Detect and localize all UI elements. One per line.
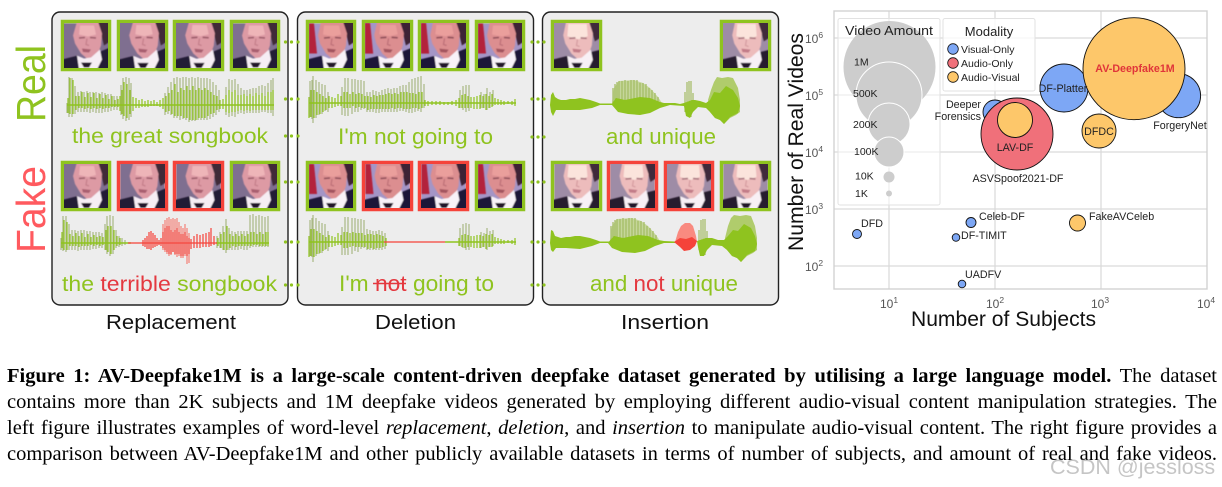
row label: Real: Real xyxy=(8,45,54,122)
legend: video amount: 1K xyxy=(855,188,868,200)
real waveform xyxy=(550,77,740,124)
y axis tick labels: 6 xyxy=(818,30,823,40)
figure caption: left figure illustrates examples of word-level replacement, deletion, and insertion to manipulate audio-visual content. The right figure provides a xyxy=(7,417,1217,439)
fake video frames xyxy=(307,162,524,210)
bubble labels xyxy=(861,63,1207,281)
y axis tick labels: 10 xyxy=(805,203,818,217)
fake waveform with replaced segment xyxy=(61,214,269,264)
real waveform xyxy=(309,76,516,123)
x axis tick labels: 10 xyxy=(1091,297,1104,311)
real transcript: and unique xyxy=(606,124,716,149)
figure caption: contains more than 2K subjects and 1M deepfake videos generated by employing different audio-visual content manipulation strategies. The xyxy=(7,391,1217,413)
x axis tick labels xyxy=(880,295,1215,311)
y axis tick labels: 4 xyxy=(818,144,823,154)
plot frame and grid xyxy=(834,11,1207,289)
real video frames xyxy=(307,21,524,70)
caption label: Insertion: Insertion xyxy=(621,312,709,334)
legend: video amount: 100K xyxy=(854,146,879,158)
bubble labels: ForgeryNet xyxy=(1153,120,1207,132)
y axis tick labels: 2 xyxy=(818,258,823,268)
bubble labels: Celeb-DF xyxy=(979,211,1025,223)
y axis tick labels: 10 xyxy=(805,260,818,274)
watermark: CSDN @jessloss xyxy=(1050,455,1215,479)
y axis title: Number of Real Videos xyxy=(785,33,808,251)
fake waveform with deleted segment xyxy=(309,215,516,262)
real transcript: the great songbook xyxy=(72,125,269,148)
legend: video amount: 10K xyxy=(855,170,874,182)
panel: Deletion xyxy=(298,12,534,305)
y axis tick labels: 10 xyxy=(805,89,818,103)
x axis tick labels: 4 xyxy=(1210,295,1215,305)
fake transcript with struck-through word: I'm not going to xyxy=(339,271,494,296)
legend: video amount: Video Amount xyxy=(845,23,933,38)
caption label: Replacement: Replacement xyxy=(106,312,236,334)
x axis tick labels: 1 xyxy=(893,295,898,305)
figure caption: comparison between AV-Deepfake1M and other publicly available datasets in terms of number of subjects, and amount of real and fake videos. xyxy=(7,443,1217,465)
bubble labels: FakeAVCeleb xyxy=(1089,211,1154,223)
real transcript: I'm not going to xyxy=(338,124,493,149)
x axis tick labels: 3 xyxy=(1104,295,1109,305)
connector dots xyxy=(284,40,546,287)
legend: video amount: 500K xyxy=(853,88,878,100)
legend: modality: Audio-Only xyxy=(961,58,1014,70)
x axis title: Number of Subjects xyxy=(911,308,1096,331)
real video frames xyxy=(552,21,770,70)
fake transcript: and not unique xyxy=(590,271,738,296)
fake video frames xyxy=(62,162,279,210)
panel: Replacement xyxy=(52,12,288,305)
bubble labels: Forensics xyxy=(935,111,981,123)
legend: modality: Visual-Only xyxy=(961,44,1015,56)
x axis tick labels: 2 xyxy=(999,295,1004,305)
bubble labels: LAV-DF xyxy=(997,142,1034,154)
bubble chart xyxy=(785,11,1215,331)
real waveform xyxy=(67,77,274,122)
y axis tick labels xyxy=(805,30,823,274)
x axis tick labels: 10 xyxy=(880,297,893,311)
legend: modality: Audio-Visual xyxy=(961,72,1020,84)
y axis tick labels: 5 xyxy=(818,87,823,97)
caption label: Deletion: Deletion xyxy=(375,312,456,334)
legend: video amount: 1M xyxy=(854,56,869,68)
real video frames xyxy=(62,21,279,70)
bubble labels: DFDC xyxy=(1084,126,1114,138)
bubble labels: UADFV xyxy=(965,269,1002,281)
x axis tick labels: 10 xyxy=(1197,297,1210,311)
y axis tick labels: 10 xyxy=(805,146,818,160)
bubble labels: DFD xyxy=(861,218,883,230)
fake waveform with inserted segment xyxy=(550,215,757,262)
fake video frames xyxy=(552,162,770,210)
bubble labels: DF-TIMIT xyxy=(961,230,1007,242)
legend: modality: Modality xyxy=(965,24,1014,39)
y axis tick labels: 3 xyxy=(818,201,823,211)
x axis tick labels: 10 xyxy=(986,297,999,311)
fake transcript: the terrible songbook xyxy=(62,273,278,296)
bubbles: datasets xyxy=(852,18,1201,288)
figure caption: Figure 1: AV-Deepfake1M is a large-scale content-driven deepfake dataset generated by utilising a large language model. The dataset xyxy=(7,365,1217,387)
bubble labels: AV-Deepfake1M xyxy=(1095,63,1175,75)
legend: video amount: 200K xyxy=(853,119,878,131)
bubble labels: DF-Platter xyxy=(1039,83,1088,95)
panel: Insertion xyxy=(542,12,778,305)
row label: Fake: Fake xyxy=(8,166,54,253)
bubble labels: Deeper xyxy=(946,99,981,111)
legend: video amount xyxy=(838,18,940,205)
legend: modality xyxy=(943,18,1035,91)
bubble labels: ASVSpoof2021-DF xyxy=(973,173,1064,185)
y axis tick labels: 10 xyxy=(805,32,818,46)
